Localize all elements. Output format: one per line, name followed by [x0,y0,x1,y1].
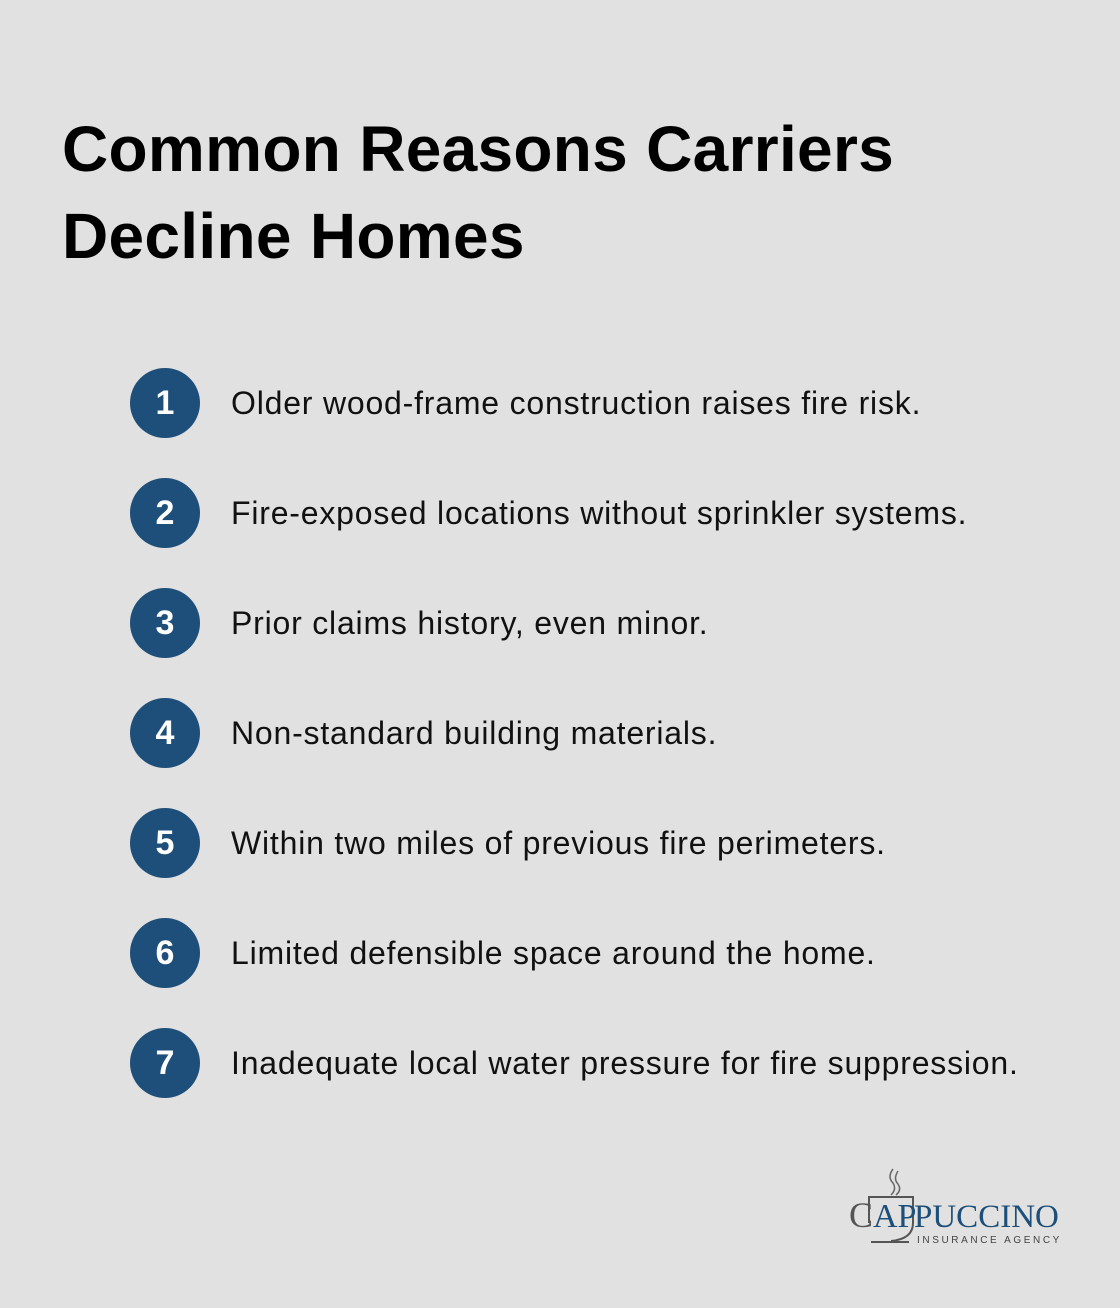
item 7: Inadequate local water pressure for fire suppression. [231,1045,1019,1081]
item 2 [130,478,967,548]
item 3 [130,588,708,658]
item 3: 3 [156,604,174,642]
item 5 [130,808,886,878]
item 1: Older wood-frame construction raises fire risk. [231,385,921,421]
item 4: 4 [156,714,174,752]
item 6: Limited defensible space around the home. [231,935,876,971]
item 7: 7 [156,1044,174,1082]
title [62,113,894,272]
item 7 [130,1028,1019,1098]
logo [849,1168,1062,1246]
logo: C [849,1195,873,1235]
item 6: 6 [156,934,174,972]
item 1 [130,368,921,438]
item 2: Fire-exposed locations without sprinkler systems. [231,495,967,531]
logo: AP [873,1198,916,1235]
title: Decline Homes [62,200,525,272]
item 4 [130,698,717,768]
item 5: 5 [156,824,174,862]
title: Common Reasons Carriers [62,113,894,185]
item 1: 1 [156,384,174,422]
logo: PUCCINO [914,1199,1059,1235]
item 3: Prior claims history, even minor. [231,605,708,641]
item 5: Within two miles of previous fire perimeters. [231,825,886,861]
item 2: 2 [156,494,174,532]
item 4: Non-standard building materials. [231,715,717,751]
logo: INSURANCE AGENCY [917,1235,1062,1246]
item 6 [130,918,876,988]
